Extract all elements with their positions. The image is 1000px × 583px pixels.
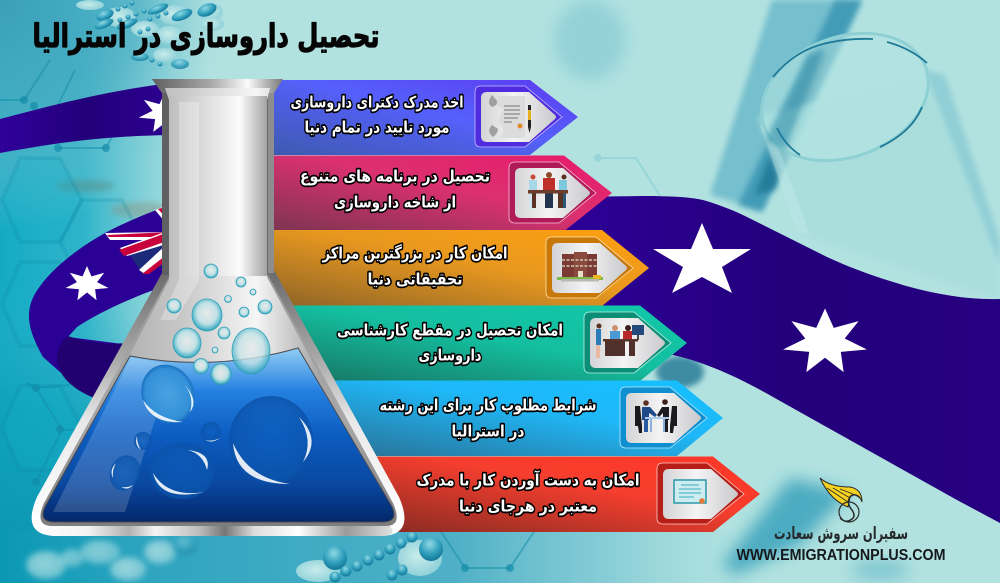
ribbon: right Australian flag band with stars: [560, 196, 1000, 523]
text: row 5: در استرالیا: [452, 422, 524, 440]
icon: people around table: [528, 172, 568, 209]
row 5: job conditions: [303, 380, 723, 456]
text: row 6: [416, 470, 640, 516]
liquid highlight: [53, 357, 173, 512]
icon frame: [620, 387, 707, 448]
star: left band: [66, 266, 108, 300]
flask lip: [152, 79, 283, 93]
text: row 1: [290, 92, 464, 136]
flask bottom band: [45, 526, 392, 536]
text: row 4: داروسازی: [418, 346, 482, 364]
icon: scroll and pen: [489, 95, 531, 138]
star: seven point: [783, 308, 867, 372]
row 3: research centers: [269, 230, 649, 306]
ribbon: top left band: [0, 83, 191, 153]
molecule beads top: [76, 0, 224, 69]
flask: [32, 79, 404, 536]
icon: winged logo: [820, 478, 862, 522]
text: row 3: [322, 244, 508, 288]
text: row 5: شرایط مطلوب کار برای این رشته: [380, 396, 596, 414]
text: row 1: اخذ مدرک دکترای داروسازی: [290, 92, 464, 112]
text: row 2: [300, 166, 490, 212]
text: row 4: [337, 320, 563, 364]
test tube stripe behind: [710, 0, 862, 210]
icon: office desk: [596, 324, 644, 358]
flask liquid: [43, 348, 394, 522]
flask glass rim: [40, 275, 397, 526]
website address: WWW.EMIGRATIONPLUS.COM: [736, 547, 946, 564]
flask neck edges: [162, 93, 169, 275]
bubble highlights: [112, 382, 312, 495]
text: row 2: تحصیل در برنامه های متنوع: [300, 166, 490, 186]
text: row 1: مورد تایید در تمام دنیا: [304, 118, 450, 136]
molecule beads bottom: [26, 532, 443, 582]
icon: certificate: [674, 480, 706, 504]
ribbon: left band with flag: [29, 204, 170, 400]
dark streaks around logo: [722, 478, 850, 575]
text: row 6: معتبر در هرجای دنیا: [459, 496, 597, 516]
icon frame: [584, 312, 671, 373]
icon frame: [657, 463, 744, 524]
text: row 6: امکان به دست آوردن کار با مدرک: [416, 470, 640, 490]
text: row 3: تحقیقاتی دنیا: [368, 270, 462, 288]
text: row 5: [380, 396, 596, 440]
text: row 3: امکان کار در بزرگترین مراکز: [322, 244, 508, 262]
icon: building: [557, 252, 603, 282]
flag: union jack: [105, 207, 170, 275]
star: large five point: [653, 223, 751, 293]
flask glass: [55, 88, 385, 497]
row 6: work with valid degree: [340, 456, 760, 532]
icon: handshake meeting: [635, 399, 677, 433]
title: تحصیل داروسازی در استرالیا: [32, 17, 380, 55]
star: top band: [139, 92, 191, 132]
icon frame: [475, 86, 562, 147]
icon frame: [509, 162, 596, 223]
liquid bubbles: [105, 356, 313, 499]
logo: [736, 478, 946, 564]
icon frame: [546, 237, 633, 298]
row 1: doctoral degree: [268, 80, 578, 155]
row 4: bachelor study: [267, 306, 687, 381]
text: row 2: از شاخه داروسازی: [334, 192, 456, 212]
text: row 4: امکان تحصیل در مقطع کارشناسی: [337, 320, 563, 340]
upper bubbles: [167, 264, 272, 384]
row 2: diverse programs: [272, 156, 612, 230]
logo text: سفیران سروش سعادت: [774, 524, 908, 544]
flask outer metal: [32, 79, 404, 536]
